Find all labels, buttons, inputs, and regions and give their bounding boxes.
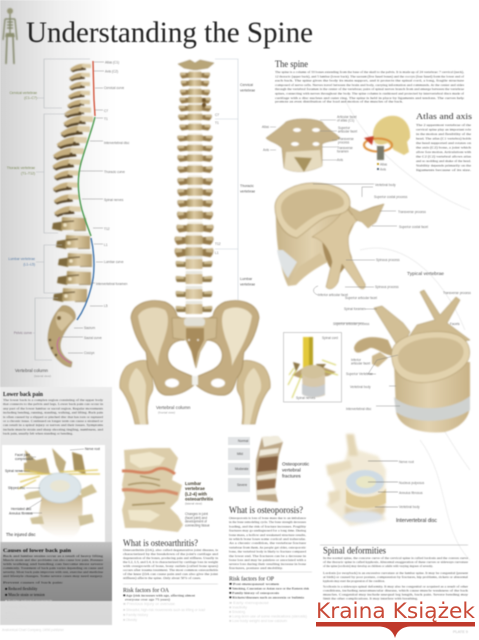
thoracic labels: Spinous process [376, 258, 400, 262]
skull legend: Atlas [380, 162, 387, 166]
risk list: ■ Rickets/diseases such as anorexia or bulimia [229, 596, 305, 600]
thoracic labels [313, 183, 428, 297]
skull legend: Axis [380, 168, 386, 172]
lateral labels [84, 60, 130, 355]
inset frame [284, 332, 342, 402]
label: thoracic vertebrae: Thoracic vertebrae [7, 166, 35, 170]
lateral labels: Sacral curve [84, 336, 102, 340]
risk list [123, 594, 205, 622]
heading: Atlas and axis [416, 111, 473, 121]
label: cervical: vertebrae [240, 88, 255, 92]
paragraph: lordosis: at birth) or caused by poor posture, compression by fractures, hip problems, rickets or abnormal [323, 575, 468, 580]
risk list: ■ Post-menopausal women [229, 582, 279, 586]
risk list [229, 582, 309, 623]
label: thoracic: vertebrae [240, 190, 255, 194]
paragraph: fractures may go undiagnosed for a long time. During [229, 529, 306, 533]
label: cervical vertebrae: Cervical vertebrae [9, 91, 37, 95]
thoracic labels: Inferior articular facet [318, 293, 348, 297]
frontal vertebrae [175, 60, 214, 299]
risk list: ■ Previous injury or overuse [123, 602, 175, 606]
illustration labels: Annulus fibrosus [9, 512, 33, 516]
atlas labels: process [338, 141, 350, 145]
causes paragraph: Prevent causes of back pain: [3, 580, 63, 584]
lateral labels: Axis (C2) [105, 70, 118, 74]
page background shading [0, 0, 115, 390]
causes paragraph: with walking and bending can become more severe [3, 562, 104, 566]
paragraph: occurs after trauma treatment. The most common osteoarthritis [123, 568, 219, 572]
lateral labels: T12 [104, 227, 110, 231]
causes bullets: ■ Reduced flexibility [5, 587, 38, 591]
paragraph: overview: of the thoracic spine is called kyphosis. Abnormal exaggeration of these curves or sideways curvature [323, 560, 469, 564]
paragraph: include muscle strain and sharp shooting tingling, numbness, and [3, 427, 103, 432]
osteoporosis section [228, 436, 312, 623]
thoracic vertebra illustration [275, 183, 384, 289]
paragraph: cervical spine play an important role [416, 128, 472, 132]
atlas labels: Axis [263, 148, 269, 152]
disc labels: Vertebral body [399, 505, 420, 509]
label: C7 T1 T12 L1: L1 [215, 251, 219, 255]
paragraph: Osteoporosis is loss of bone mass due to an imbalance [229, 516, 307, 520]
lateral labels: L5 [104, 304, 108, 308]
paragraph: back pain, usually felt when standing or bending. [3, 432, 73, 437]
label boxes: Severe [237, 483, 247, 487]
inset labels: Spinal cord [322, 336, 338, 340]
label: cervical vertebrae: (C1–C7) [24, 96, 37, 100]
thoracic labels: Vertebral body [375, 183, 396, 187]
paragraph: lordosis [323, 571, 468, 583]
paragraph: The 2 uppermost vertebrae of the [416, 123, 472, 127]
intervertebral disc illustration [326, 434, 438, 526]
atlas labels: Superior [338, 126, 350, 130]
causes paragraph [3, 554, 104, 584]
paragraph: loading, and the risk of fracture increases. Fragility [229, 524, 306, 529]
paragraph: each back. The spine gives the body its main support, and it protects the spinal cord, a long, fragile structure [275, 79, 465, 84]
paragraph: spines, connecting with nerves throughout the body. The spine column is cushioned and protected by intervertebral discs made of [275, 92, 465, 96]
title: Understanding the Spine [26, 17, 313, 49]
typical vertebra labels: articular facet [351, 362, 370, 366]
label: osteoporotic fractures: fractures [282, 474, 301, 480]
skull legend [377, 162, 387, 172]
illustration labels: The injured disc [6, 532, 36, 537]
paragraph: characterized by the breakdown of the joint's cartilage and [123, 552, 218, 556]
rule [320, 544, 468, 546]
paragraph: with overgrowth of bone, bony outlets (called bone spurs) [123, 564, 218, 569]
paragraph: overview: of the spine (scoliosis) may develop as children or adults with varying degrees of severity. [323, 564, 433, 568]
paragraph: 12 thoracic (upper back), and 5 lumbar (lower back). The sacrum (five fused bones) and the coccyx (four fused) form the lower end of [275, 74, 465, 79]
risk list: ■ Early menopause [229, 601, 269, 605]
paragraph: the axis (C2) bone, a joint which [416, 146, 471, 150]
risk list: ■ Long-term use of some medications (steroids) [229, 614, 307, 618]
paragraph: in the motion and flexibility of the [416, 132, 472, 136]
plate number: PLATE 9 [453, 630, 468, 634]
typical vertebra labels: Superior articular facet [345, 296, 377, 300]
text block: the spine [275, 59, 465, 104]
spinal cord: lumbar blue [77, 238, 94, 320]
paragraph: degeneration of the bones, producing pain and stiffness. Usually in [123, 556, 218, 561]
causes paragraph: commonly. Treatment of back pain varies depending on cause and [3, 566, 103, 570]
icon: small skeleton figure [3, 8, 17, 64]
causes bullets: ■ Sudden awkward movements [5, 599, 53, 603]
paragraph: the C2 (C2) vertebral allows atlas [416, 154, 472, 158]
lateral labels: Coccyx [84, 351, 95, 355]
lower back pain panel [0, 387, 112, 625]
lateral labels: Cervical curve [104, 86, 124, 90]
spinal deformities section [320, 545, 469, 600]
paragraph: scoliosis: conditions, including neuromuscular disease, which cause muscle weakness of the back [323, 588, 468, 594]
label: change note: Changes in joint [185, 512, 208, 516]
paragraph: lordosis: Lordosis (or swayback) is an excessive curvature at the lumbar spine. It may be congenital (present [323, 571, 468, 575]
paragraph: overview [323, 556, 469, 568]
paragraph: through the vertebral foramen is the center of the vertebrae; pairs of spinal nerves branch from and emerge between the vertebrae [275, 87, 465, 91]
label: C7 T1 T12 L1: T1 [215, 121, 219, 125]
label: lumbar vertebrae: (L1–L5) [23, 262, 35, 266]
paragraph: or a chronic issue. Continued on longer term can cause a strained or [3, 419, 104, 423]
label: lumbar: Lumbar [240, 277, 252, 281]
spinal cord: sacral pink [57, 337, 71, 363]
paragraph: overview: In the normal spine, the concave curve of the cervical spine is called lordosis and the convex curve [323, 556, 469, 561]
inset: spinal cord and nerves [284, 332, 342, 402]
paragraph: promote an even distribution of the load and motion of the muscles of the back. [275, 100, 403, 104]
spinal cord: cervical red [93, 61, 95, 116]
paragraph: ligaments because of its size. [416, 168, 471, 172]
paragraph: scoliosis: limit the other complications. It may interfere with breathing. [323, 596, 418, 600]
lateral labels: Sacrum [84, 326, 95, 330]
thoracic labels: Superior costal facet [399, 225, 428, 229]
lateral labels: Lumbar curve [104, 260, 124, 264]
causes bullets [5, 587, 53, 620]
risk list: ■ Low body weight and low calcium [229, 619, 287, 623]
sacrum and coccyx [48, 306, 75, 367]
atlas labels: foramen [337, 150, 349, 154]
label: pelvic curve: Pelvic curve [14, 331, 32, 335]
causes paragraph: Back and lumbar strains occur as a result of heavy lifting [3, 554, 103, 558]
paragraph: allow fore motion. Articulations with [416, 150, 471, 154]
rule [123, 583, 218, 585]
heading: What is osteoarthritis? [123, 538, 198, 549]
label boxes [228, 437, 250, 492]
risk list: ■ Family history [123, 613, 148, 617]
typical vertebra labels: Intervertebral disc [346, 407, 372, 411]
label: change note: development of [185, 520, 207, 524]
atlas labels: Axis [337, 158, 343, 162]
femurs [120, 360, 270, 424]
atlas labels [262, 115, 357, 162]
typical vertebra labels: Superior articular process [333, 322, 370, 326]
paragraph [275, 70, 465, 104]
paragraph: scoliosis: Scoliosis is a sideways spinal deformity. It may also be congenital or acquired as a result of other [323, 584, 469, 588]
spinal cord: thoracic green [78, 117, 95, 236]
typical vertebra labels: Superior Vertebrae [346, 372, 373, 376]
paragraph: the L2, L3, and L4, it is characterized by cartilage loss in weight [123, 560, 218, 565]
risk list: ■ Smoking, Caucasian or Asian race or the Eastern risk [229, 586, 309, 592]
heading: The spine [275, 59, 308, 69]
typical vertebra labels: Transverse process [443, 291, 471, 295]
thoracic labels: Spinous process [375, 285, 399, 289]
paragraph: the lower end. The fractures can be a decrease in [229, 554, 306, 558]
paragraph: the head supported and rotates on [416, 141, 471, 145]
label: thoracic vertebrae: (T1–T12) [21, 172, 35, 176]
label: change note: (facet joint) and [185, 516, 207, 520]
paragraph: any part of the lower lumbar or sacral region. Regular movements [3, 406, 104, 410]
text block: atlas and axis [416, 111, 473, 172]
label: illustration caption: (L2-4) with [185, 491, 207, 496]
illustration labels: Facet joint [15, 453, 30, 457]
heading: typical vertebrae: Typical vertebrae [407, 271, 444, 277]
typical vertebra labels: Spinal foramen [344, 307, 366, 311]
illustration labels: compression [15, 457, 33, 461]
risk list: ■ Smoking [229, 610, 245, 614]
lateral spine diagram [7, 59, 130, 378]
paragraph: is often caused by a slipped or pinched disc that has torn or ruptured [3, 415, 103, 419]
paragraph: The lower back is a complex region consisting of the upper body [3, 398, 103, 402]
disc labels: Nerve root [399, 460, 414, 464]
paragraph: bone, the vertebral body is likely to fracture compared [229, 550, 306, 555]
paragraph: Stability depends primarily on the [416, 164, 472, 168]
label boxes: Mild [237, 452, 243, 456]
atlas labels: Transverse [337, 146, 353, 150]
dark panel [0, 542, 112, 601]
lateral vertebrae [52, 63, 93, 302]
paragraph [123, 548, 219, 580]
paragraph [416, 123, 472, 172]
heading: risk factors: Risk factors for OP [229, 576, 275, 582]
frontal spine and pelvis [120, 59, 270, 424]
rule [229, 571, 312, 573]
white image box [2, 445, 105, 542]
label: lumbar: vertebrae [240, 282, 255, 286]
label: C7 T1 T12 L1 [215, 113, 221, 255]
paragraph: cartilage with a disc nucleus and outer ring. The spine is held in place by ligaments and tendons. The curves help [275, 96, 464, 100]
label: cervical: Cervical [240, 83, 253, 87]
label: osteoporotic fractures: vertebral [282, 468, 301, 474]
label: osteoporotic fractures: Osteoporotic [282, 462, 309, 468]
panel background [0, 387, 112, 625]
lateral labels: Atlas (C1) [105, 60, 119, 64]
lateral labels: C7 [104, 109, 108, 113]
heading: Lower back pain [3, 392, 44, 398]
paragraph: Osteoarthritis (OA), also called degenerative joint disease, is [123, 548, 219, 553]
bracket lines [215, 59, 238, 300]
paragraph: in which bone loses some cortical and trabecular. [229, 537, 306, 541]
label: illustration caption: vertebrae [185, 486, 205, 491]
atlas vertebra illustration [266, 119, 340, 172]
causes paragraph: severity. Most back pain improves with rest, exercise and medicine [3, 570, 104, 575]
inset: spinal cord and nerves: Spinal nerves [296, 396, 316, 400]
illustration: osteoporotic vertebrae [256, 436, 283, 502]
paragraph: scoliosis: muscles. Congenital may include unequal leg length, back pain. Severe bending may [323, 592, 468, 598]
paragraph: bone loss and may be painless or associated with a [229, 558, 307, 562]
typical vertebra labels: Vertebral body [350, 385, 371, 389]
paragraph: lordosis: kyphosis may exert the progression of the condition. [323, 579, 385, 583]
lateral caption: (lateral view) [34, 374, 51, 378]
label boxes: Moderate [235, 467, 249, 471]
typical vertebra labels: Inferior [351, 358, 361, 362]
label: illustration caption: osteoarthritis [185, 497, 214, 502]
faint background sketch [345, 100, 470, 560]
paragraph: composed of nerve cells. Nerves travel between the brain and body, carrying information and commands. At the center and sides [275, 83, 465, 88]
osteoarthritis section [122, 448, 219, 622]
illustration labels: Spinal nerve [5, 469, 23, 473]
label: illustration caption: (lateral view) [185, 501, 202, 505]
paragraph: scoliosis [323, 584, 469, 600]
illustration labels: Nerve root [85, 447, 100, 451]
lateral labels: Spinal nerves [104, 198, 124, 202]
atlas labels: Atlas [262, 125, 269, 129]
label: lumbar vertebrae: Lumbar vertebrae [8, 257, 35, 261]
paragraph: As a chronic condition, the vertebrae fracture [229, 541, 307, 546]
paragraph: head. The atlas (C1 vertebra) holds [416, 136, 472, 140]
causes paragraph: and lifestyle changes. Some severe cases may need surgery. [3, 574, 103, 578]
causes paragraph: Muscle strain and disc problems can also cause low pain. Pressure [3, 558, 104, 562]
illustration labels: Slipped disc [8, 486, 26, 490]
frontal caption: (frontal view) [158, 411, 175, 415]
risk list: ■ Family history of osteoporosis [229, 591, 280, 595]
paragraph: and so nodding and shake of the head. [416, 159, 471, 163]
causes bullets: ■ Heavy lifting [5, 605, 27, 609]
paragraph: fractures, posture and mobility. [229, 566, 283, 571]
lateral labels: Intervertebral disc [104, 141, 130, 145]
disc labels [368, 460, 425, 509]
illustration labels: Herniated disc [11, 507, 32, 511]
lateral labels: L1 [104, 243, 108, 247]
paragraph: including bending, running, standing, walking, and lifting. Back pain [3, 411, 103, 416]
paragraph: that connects to the pelvis and legs. Lower back pain can occur in [3, 402, 103, 406]
paragraph [3, 398, 104, 437]
lateral caption: Vertebral column [15, 368, 48, 373]
frontal caption: Vertebral column [156, 405, 190, 410]
label boxes: Normal [238, 439, 249, 443]
label: illustration caption: Lumbar [185, 481, 201, 486]
hip bones [131, 301, 259, 395]
disc labels: Annulus fibrosus [399, 491, 423, 495]
risk list: ■ Age (risk increases with age, affecting almost [123, 594, 195, 598]
lateral labels: T1 [104, 117, 108, 121]
paragraph: vertebrae from them. As people get older, osteoporotic [229, 545, 307, 550]
logo wordmark: Kraina Książek [316, 599, 476, 623]
typical vertebra labels: Facets [450, 322, 460, 326]
risk list: ■ Obesity [123, 618, 137, 622]
risk list: everyone over age 75 years) [125, 598, 170, 602]
paragraph [229, 516, 307, 571]
logo: Kraina Książek [316, 599, 476, 638]
label: change note: connecting tissue [185, 523, 210, 527]
thoracic labels: Superior costal process [374, 195, 408, 199]
disc labels: Nucleus pulposus [399, 481, 425, 485]
atlas labels: articular facet [338, 130, 357, 134]
label: C7 T1 T12 L1: T12 [215, 242, 221, 246]
disc caption: Intervertebral disc [396, 518, 438, 524]
callout leader lines [62, 62, 104, 353]
footer note: Anatomical Chart Company, LWW publisher [2, 628, 65, 632]
heading: causes: Causes of lower back pain [3, 548, 72, 554]
label: C7 T1 T12 L1: C7 [215, 113, 219, 117]
typical vertebra labels [333, 291, 471, 411]
paragraph: bone mass, a hollow and weakened structure results, [229, 533, 306, 538]
risk list: ■ Inactivity [229, 606, 247, 610]
paragraph: stiffness) affects the spine. Only about 50% of cases. [123, 576, 201, 580]
typical vertebra illustration [333, 290, 472, 432]
heading: Spinal deformities [323, 546, 386, 556]
logo book shape [316, 622, 475, 638]
atlas labels: Transverse [338, 137, 354, 141]
paragraph: in the bone remodeling cycle. The bone strength decreases [229, 520, 307, 524]
illustration: lumbar vertebrae with osteoarthritis [122, 448, 183, 532]
sacrum [172, 301, 217, 368]
paragraph: The spine is a column of 33 bones extending from the base of the skull to the pelvis. It is made up of 24 vertebrae: 7 cervical (neck), [275, 70, 464, 75]
lateral labels: Thoracic curve [104, 170, 125, 174]
causes bullets: ■ Injury [5, 611, 17, 615]
causes bullets: ■ Conditions [5, 616, 24, 620]
causes bullets: ■ Muscle strain or tension [5, 593, 45, 597]
paragraph: severe loss during their resulting increase in bone [229, 562, 307, 566]
inset art [288, 337, 338, 398]
label: thoracic: Thoracic [240, 184, 254, 188]
paragraph: of the knee (OA can cause pain and can also give the joint [123, 572, 218, 576]
illustration labels [5, 447, 100, 537]
atlas labels: Articular facet [337, 115, 356, 119]
atlas labels: of atlas (C1) [337, 119, 354, 123]
lateral labels: Intervertebral foramen [96, 282, 128, 286]
brackets [33, 59, 90, 360]
heading: risk factors: Risk factors for OA [123, 587, 169, 594]
illustration: disc and nerves [18, 448, 100, 538]
risk list: ■ Stressful, high-risk movements such as lifting or load [123, 608, 205, 612]
heading: What is osteoporosis? [229, 505, 303, 516]
icon: skull with rotation arrow [364, 116, 410, 160]
thoracic labels: Transverse process [398, 210, 426, 214]
paragraph: can result in a spinal injury or nerves and their issues. Symptoms [3, 423, 104, 427]
